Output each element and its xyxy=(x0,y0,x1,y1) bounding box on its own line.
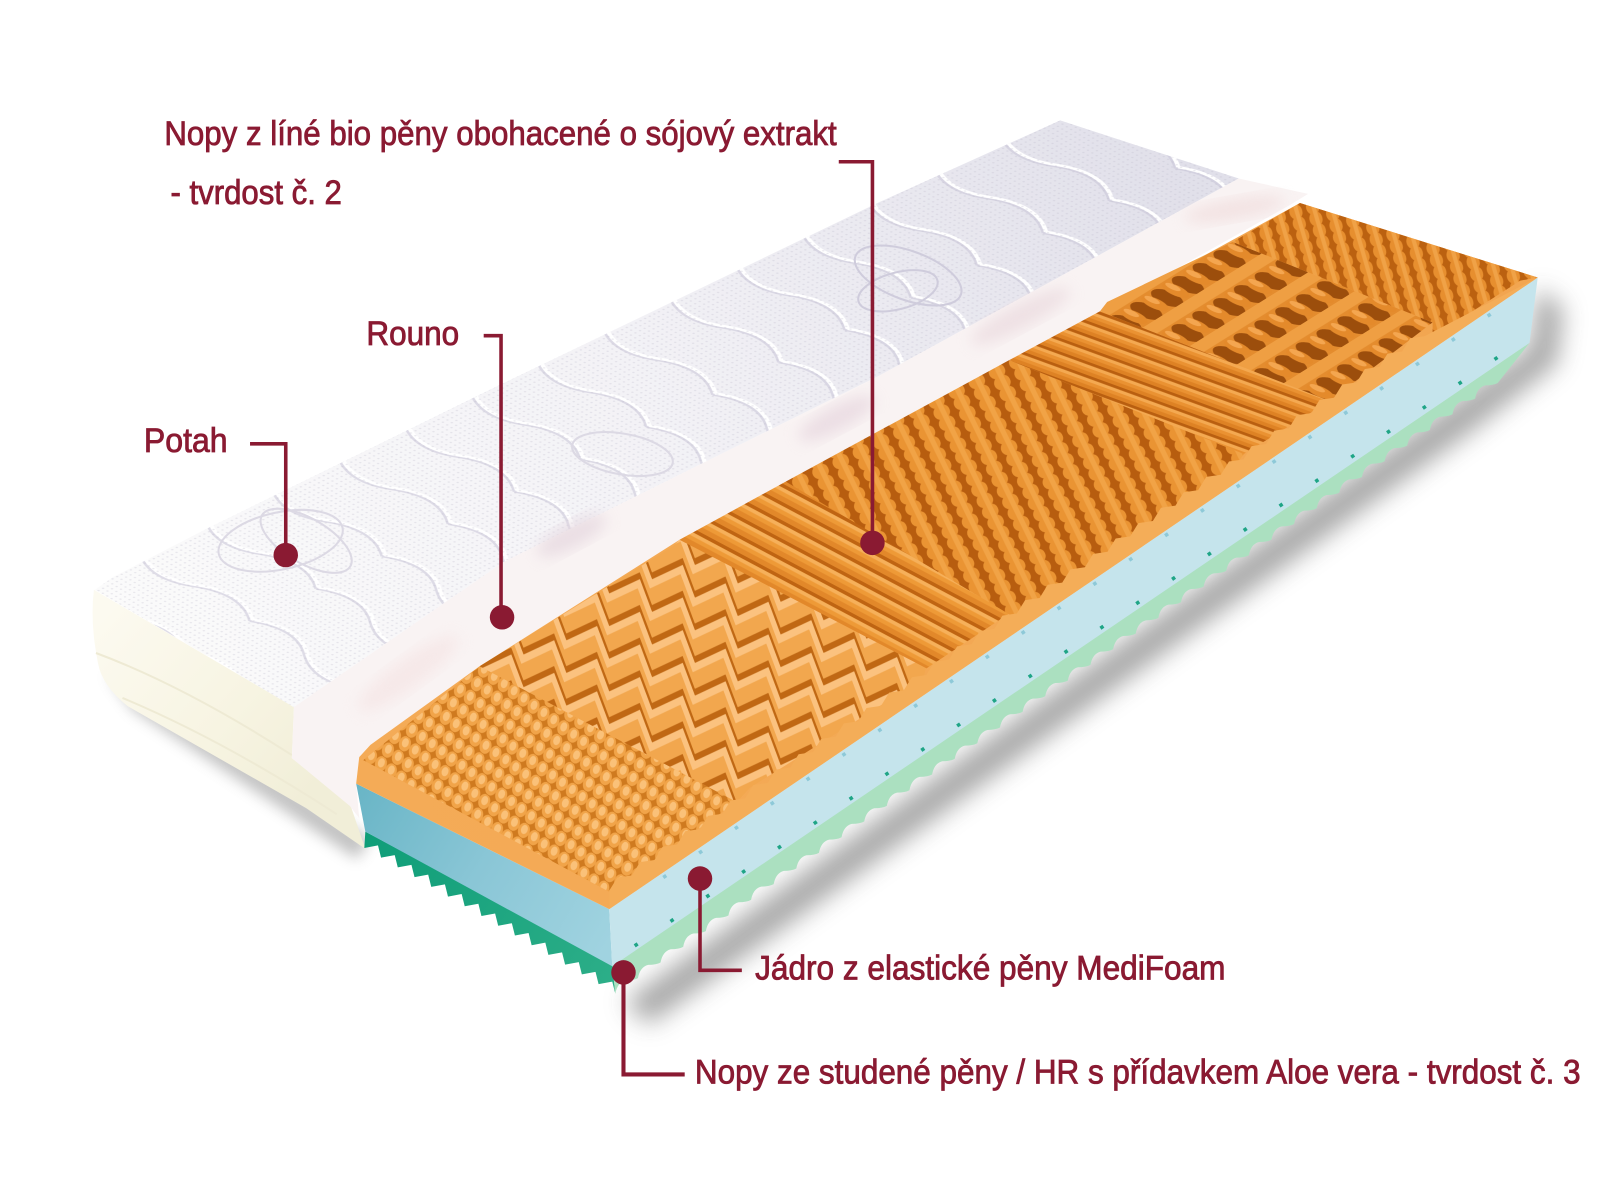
callout: Potah xyxy=(144,422,298,567)
blue core, left face xyxy=(356,784,612,966)
callout: bottom foam nubs xyxy=(611,960,1581,1092)
shadow under mattress xyxy=(107,288,1563,1024)
stripes zone: far xyxy=(1009,311,1330,454)
green bottom layer, right face xyxy=(612,343,1530,994)
rouno fleece layer xyxy=(292,179,1308,818)
orange foam top layer xyxy=(356,203,1538,909)
cover end face xyxy=(93,590,365,849)
zigzag zone xyxy=(480,540,927,802)
callout: Potah: Potah xyxy=(144,422,228,460)
green bottom layer, left face xyxy=(364,832,615,994)
ridges zone: end xyxy=(1233,203,1538,337)
callout: core xyxy=(688,866,1225,988)
callout: top foam nubs xyxy=(164,115,885,555)
callout: Rouno xyxy=(366,315,514,630)
mattress illustration xyxy=(93,120,1538,994)
callout: Rouno: Rouno xyxy=(366,315,459,353)
deep humps zone xyxy=(1100,242,1433,401)
front band teeth xyxy=(609,278,1538,909)
cover top quilt xyxy=(95,120,1239,707)
ridges zone: middle xyxy=(786,360,1244,617)
blue core, right face xyxy=(609,278,1538,966)
callout: core: Jádro z elastické pěny MediFoam xyxy=(755,950,1225,988)
callout: top foam nubs: Nopy z líné bio pěny obohacené o sójový extrakt xyxy=(164,115,837,153)
stripes zone: near xyxy=(680,482,1014,668)
callout: top foam nubs: - tvrdost č. 2 xyxy=(170,174,342,212)
nubs zone: front xyxy=(363,666,737,892)
